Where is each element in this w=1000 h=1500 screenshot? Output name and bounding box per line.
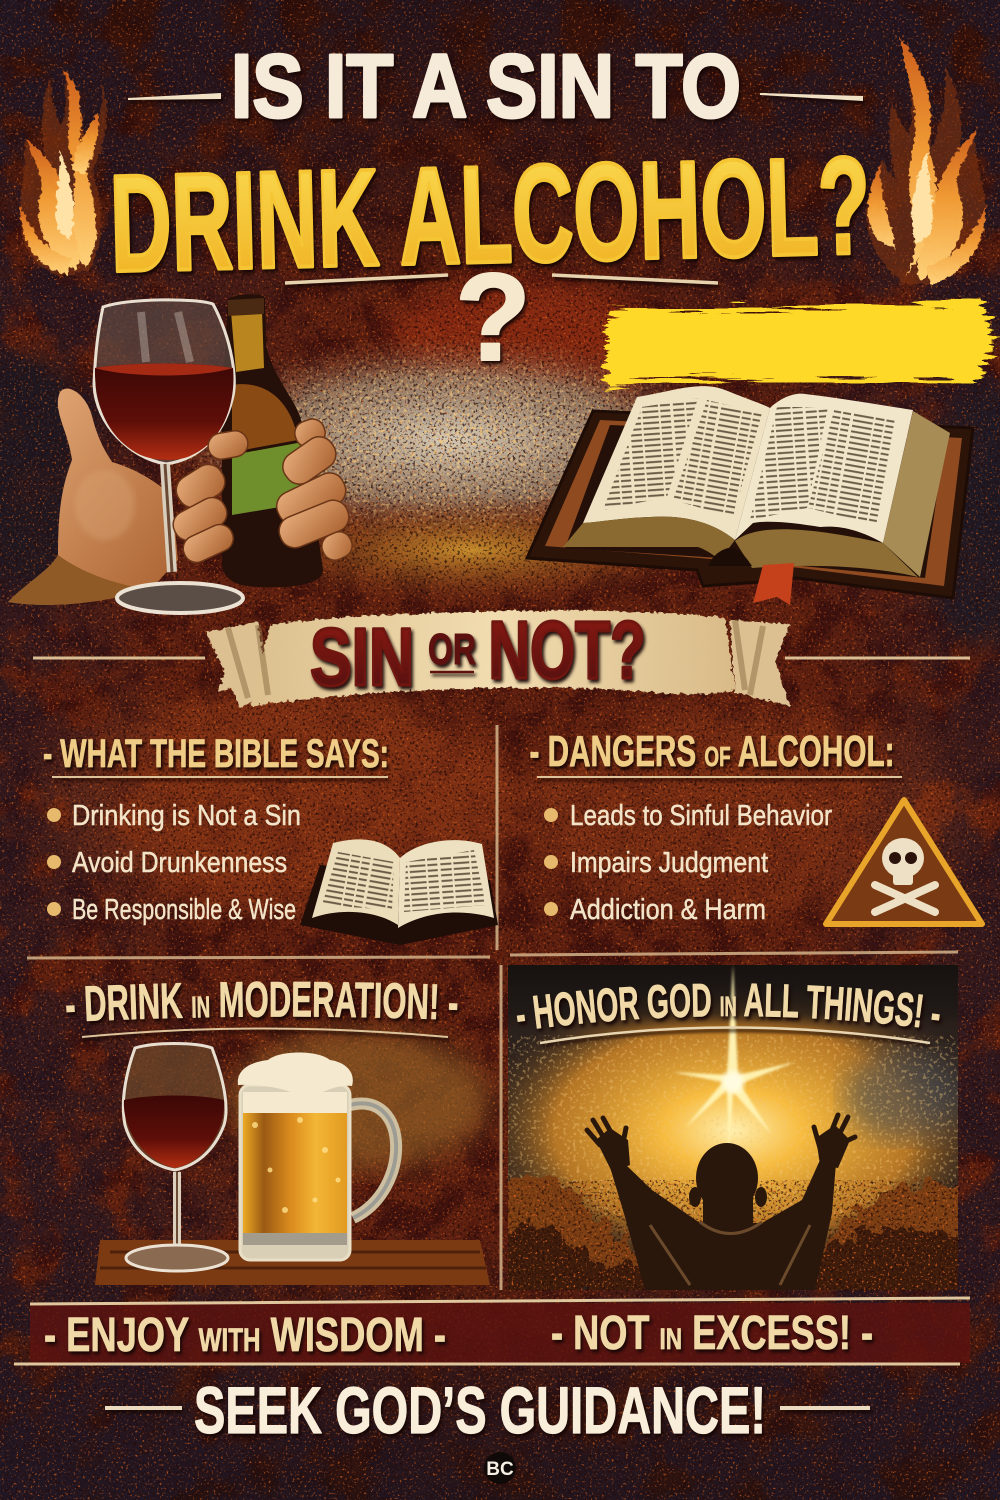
- band: enjoy with wisdom, not in excess: [14, 1298, 970, 1364]
- heading: drink in moderation: - DRINK IN MODERATION! -: [66, 981, 462, 1026]
- person silhouette: [587, 1115, 855, 1290]
- illustration: open Bible: [527, 386, 973, 605]
- scene: praying figure under sun: [508, 965, 958, 1290]
- icon: wine glass: [123, 1044, 228, 1271]
- panel: dangers of alcohol: [530, 727, 982, 926]
- printed text columns: [603, 398, 895, 525]
- icon: right flames: [866, 38, 986, 285]
- panel: honor God in all things: [508, 965, 958, 1290]
- wine glass: [94, 300, 243, 613]
- panel dividers: [27, 725, 958, 1290]
- illustration: hands holding wine glass and beer bottle: [8, 294, 356, 613]
- ribbon bookmark: [753, 563, 794, 605]
- banner: Sin or Not?: OR: [428, 625, 476, 674]
- backdrop texture: [230, 1030, 490, 1170]
- icon: left flames: [20, 68, 107, 276]
- logo badge: [484, 1452, 516, 1484]
- list: Bible points: Be Responsible & Wise: [72, 894, 296, 926]
- band: enjoy with wisdom, not in excess: - NOT IN EXCESS! -: [551, 1307, 873, 1360]
- banner: Sin or Not?: SIN: [310, 612, 414, 703]
- heading: what the Bible says: - WHAT THE BIBLE SAYS:: [43, 732, 389, 776]
- beer bottle: [222, 294, 323, 587]
- question mark divider: ?: [455, 249, 531, 387]
- list: Bible points: Avoid Drunkenness: [72, 847, 287, 879]
- banner: Sin or Not?: NOT?: [488, 605, 646, 696]
- sun rays: [674, 966, 794, 1143]
- list: dangers: [544, 800, 832, 926]
- list: dangers: Impairs Judgment: [570, 847, 768, 879]
- table: [95, 1240, 490, 1285]
- banner: Sin or Not?: [33, 605, 970, 708]
- heading: honor God in all things: - HONOR GOD IN ALL THINGS! -: [516, 983, 942, 1032]
- icon: small open Bible: [300, 839, 498, 945]
- panel: what the Bible says: [43, 732, 498, 945]
- list: Bible points: [47, 800, 301, 926]
- logo badge: BC: [486, 1459, 514, 1480]
- band: enjoy with wisdom, not in excess: - ENJOY WITH WISDOM -: [44, 1309, 446, 1362]
- closing message: SEEK GOD’S GUIDANCE!: [194, 1373, 766, 1447]
- panel: drink in moderation: [66, 981, 500, 1285]
- heading: dangers of alcohol: - DANGERS OF ALCOHOL:: [530, 727, 894, 776]
- icon: beer mug: [238, 1052, 396, 1260]
- title: IS IT A SIN TO: [231, 37, 741, 137]
- title: [108, 37, 872, 301]
- fingers: [168, 416, 356, 567]
- hand left: [8, 389, 178, 605]
- question mark divider: [285, 249, 718, 387]
- yellow brush smear: [606, 302, 994, 388]
- icon: skull warning triangle: [826, 800, 982, 924]
- list: dangers: Leads to Sinful Behavior: [570, 800, 832, 832]
- pages: [563, 386, 950, 577]
- list: Bible points: Drinking is Not a Sin: [72, 800, 301, 832]
- list: dangers: Addiction & Harm: [570, 894, 766, 926]
